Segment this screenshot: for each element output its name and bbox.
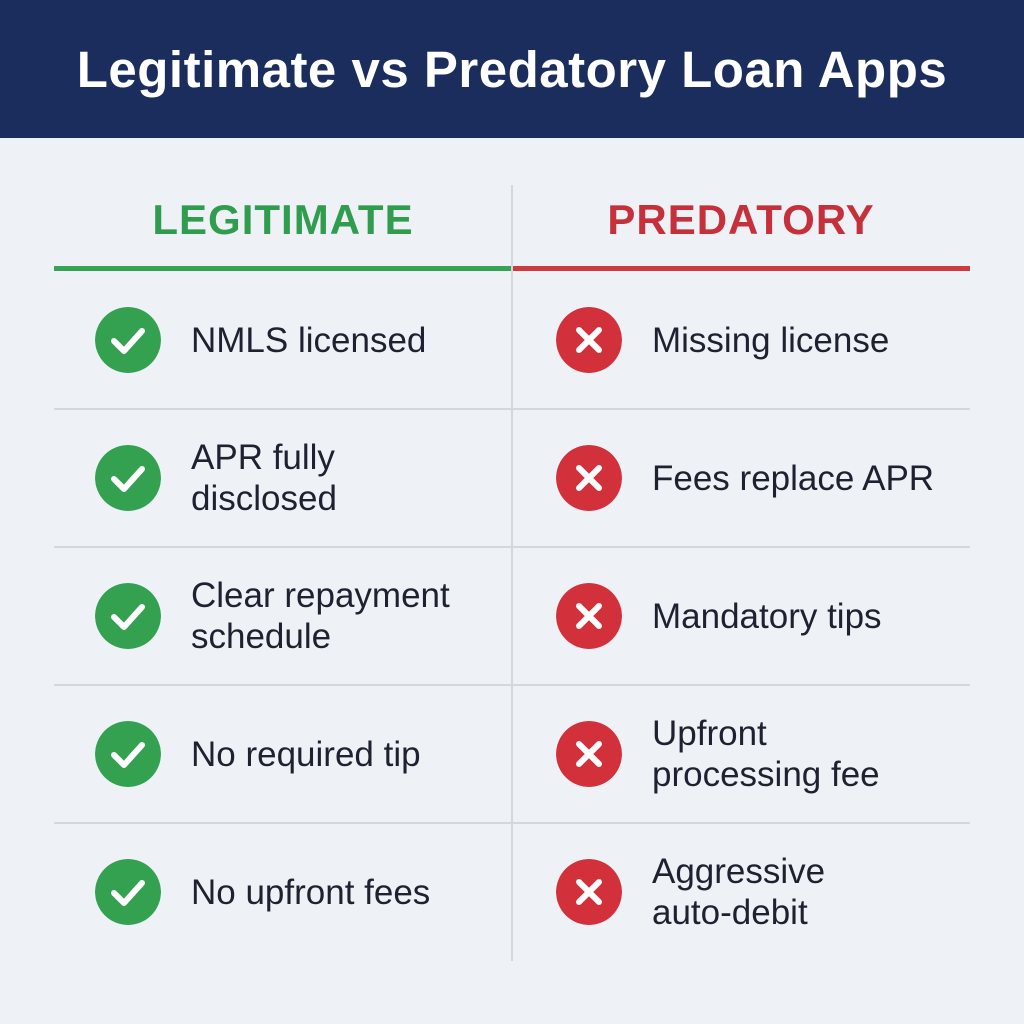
item: upfront processing fee	[556, 714, 880, 794]
item: no required tip: No required tip	[191, 734, 421, 774]
item: clear repayment schedule: schedule	[191, 617, 331, 656]
item: clear repayment schedule: Clear repayment	[191, 576, 450, 615]
heading: predatory: PREDATORY	[607, 196, 875, 243]
item: upfront processing fee: processing fee	[652, 755, 880, 794]
item: aggressive auto-debit	[556, 852, 825, 932]
item: no upfront fees: No upfront fees	[191, 872, 430, 912]
item: clear repayment schedule	[95, 576, 450, 656]
item: aggressive auto-debit: Aggressive	[652, 852, 825, 891]
item: NMLS licensed: NMLS licensed	[191, 320, 426, 360]
item: APR fully disclosed: disclosed	[191, 479, 337, 518]
item: no required tip	[95, 721, 421, 787]
item: APR fully disclosed: APR fully	[191, 438, 335, 477]
item: upfront processing fee: Upfront	[652, 714, 767, 753]
panel: predatory items	[556, 307, 934, 932]
item: missing license	[556, 307, 889, 373]
item: mandatory tips: Mandatory tips	[652, 596, 882, 636]
item: APR fully disclosed	[95, 438, 337, 518]
item: NMLS licensed	[95, 307, 426, 373]
heading: legitimate: LEGITIMATE	[152, 196, 414, 243]
item: no upfront fees	[95, 859, 430, 925]
item: fees replace APR	[556, 445, 934, 511]
title	[0, 0, 1024, 138]
title: Legitimate vs Predatory Loan Apps	[77, 41, 947, 98]
panel: legitimate items	[95, 307, 450, 925]
item: fees replace APR: Fees replace APR	[652, 458, 934, 498]
item: missing license: Missing license	[652, 320, 889, 360]
item: aggressive auto-debit: auto-debit	[652, 893, 808, 932]
item: mandatory tips	[556, 583, 882, 649]
